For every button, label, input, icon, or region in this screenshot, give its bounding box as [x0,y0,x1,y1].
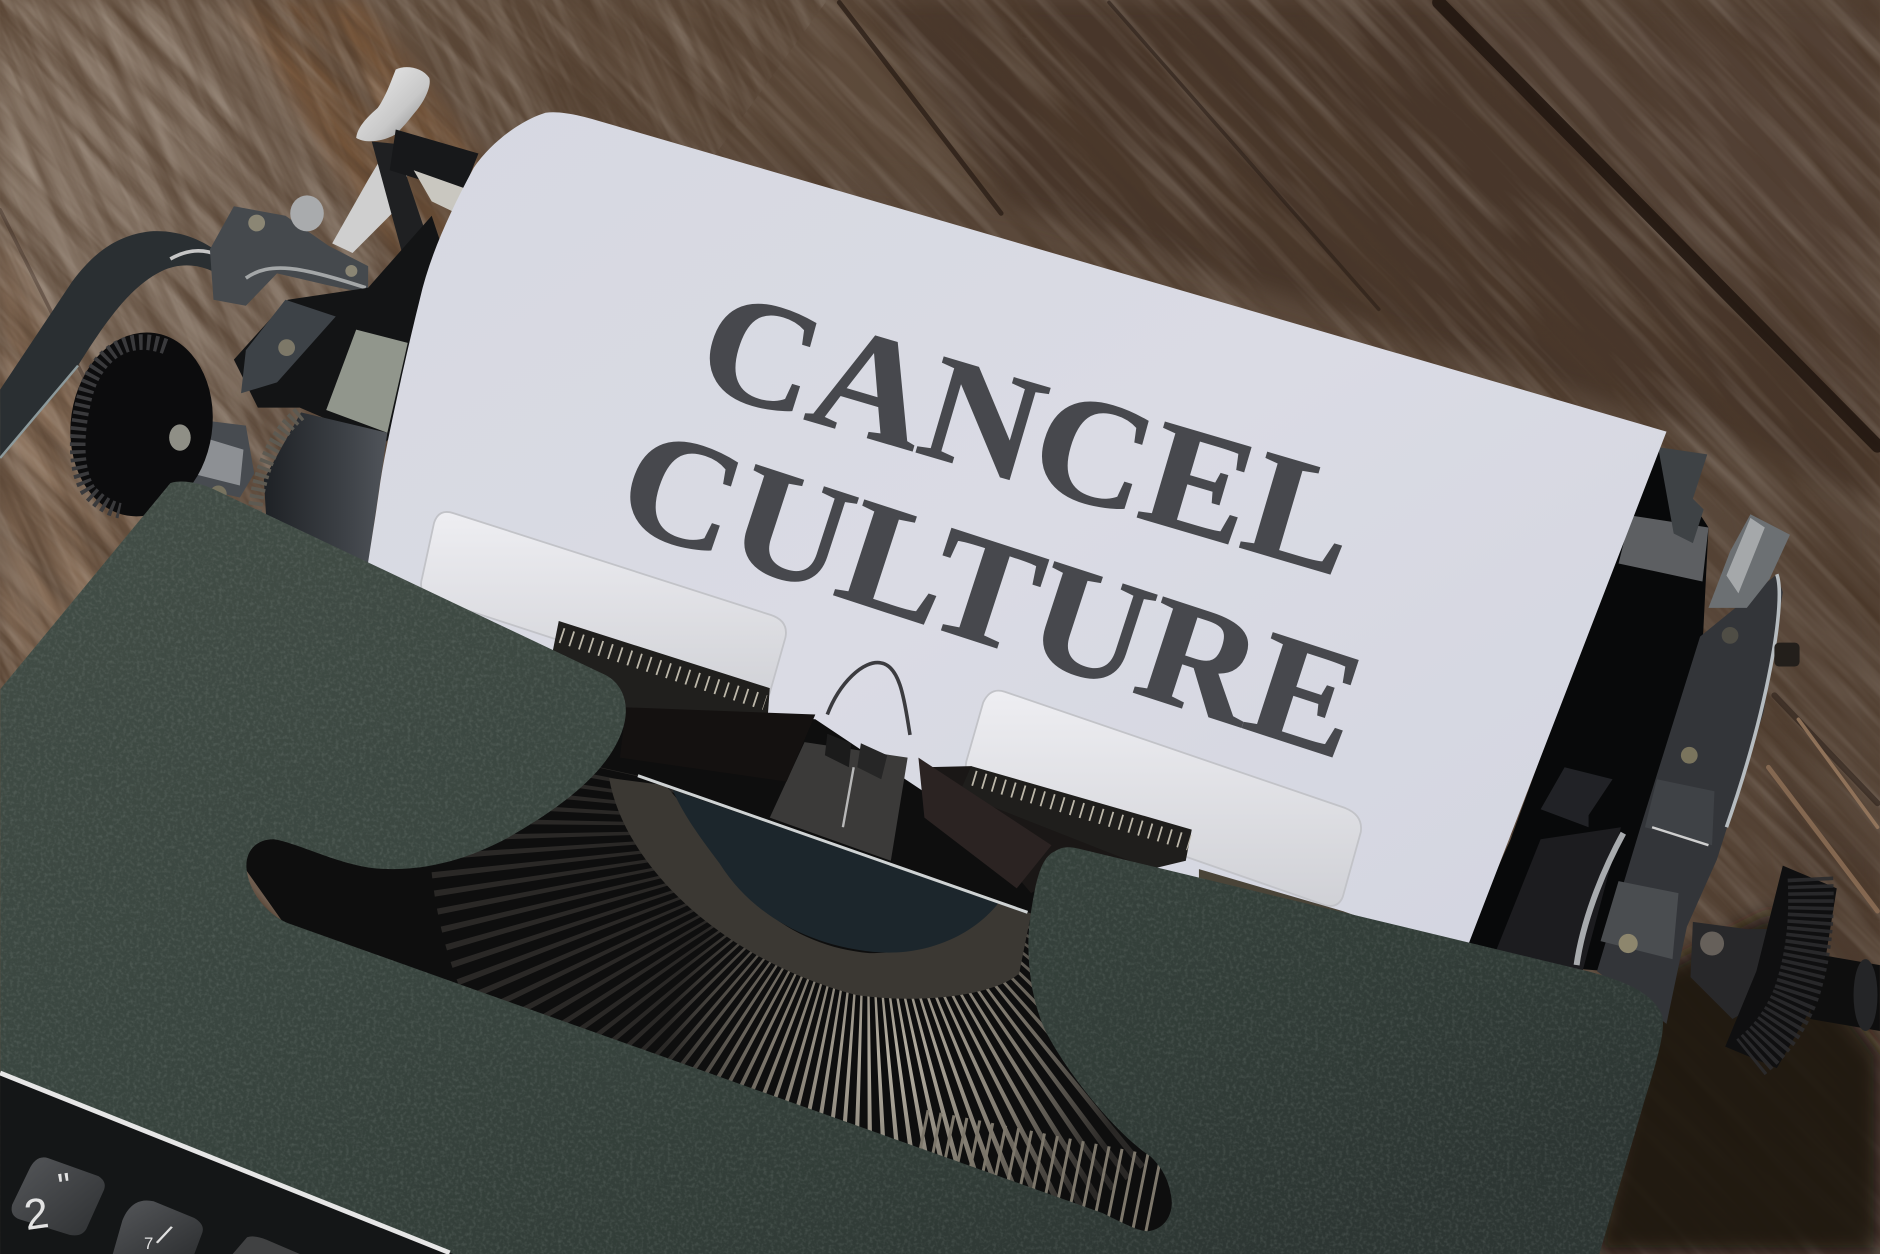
chrome arm [332,150,414,253]
side plate [1597,574,1783,1024]
key: 2 [12,1157,105,1240]
type basket ring [609,778,1031,999]
key: 2: 2 [21,1189,52,1240]
typewriter interior [246,621,1355,1232]
black roller [390,129,478,193]
right knob [1725,866,1837,1068]
platen roller [264,412,387,575]
typewriter green body [0,456,1702,1254]
chrome hub [168,420,254,498]
lower dark mechanism [234,216,480,444]
black interior [1457,444,1708,971]
key: slash: / [153,1220,175,1252]
bracket plate [210,206,368,306]
type bars long tail [917,1157,1157,1205]
levers [1658,447,1707,543]
paper sheet [360,112,1667,959]
text: CANCEL: CANCEL [683,257,1377,608]
gear teeth [254,414,300,551]
key: 2: " [55,1164,74,1207]
dark cavity [216,707,1199,1254]
grey block [326,330,408,433]
right comb [924,766,1186,893]
shaft [1810,953,1880,1031]
ribbon vibrator metal [770,742,908,861]
type bar fan [432,768,1144,1206]
key: third [233,1236,300,1254]
chrome thumb lever [356,67,430,141]
text: CULTURE: CULTURE [601,393,1383,791]
segment [673,790,999,953]
key: slash: 7 [144,1234,153,1253]
right carriage mechanism [1457,444,1880,1068]
left paper guide window [421,512,786,704]
left carriage mechanism [0,67,480,575]
right paper guide window [966,691,1361,906]
dark arm [372,141,434,314]
chrome edge [638,776,1028,912]
keyboard deck [0,1072,453,1254]
key: slash [113,1200,203,1254]
knob [59,323,224,526]
wire loop [827,663,910,735]
left ribbon [620,707,815,782]
right ribbon [918,758,1051,888]
left comb [552,621,770,722]
icon: carriage return bar [0,231,237,458]
chrome strip [0,1073,450,1253]
right hub [1690,922,1774,1019]
